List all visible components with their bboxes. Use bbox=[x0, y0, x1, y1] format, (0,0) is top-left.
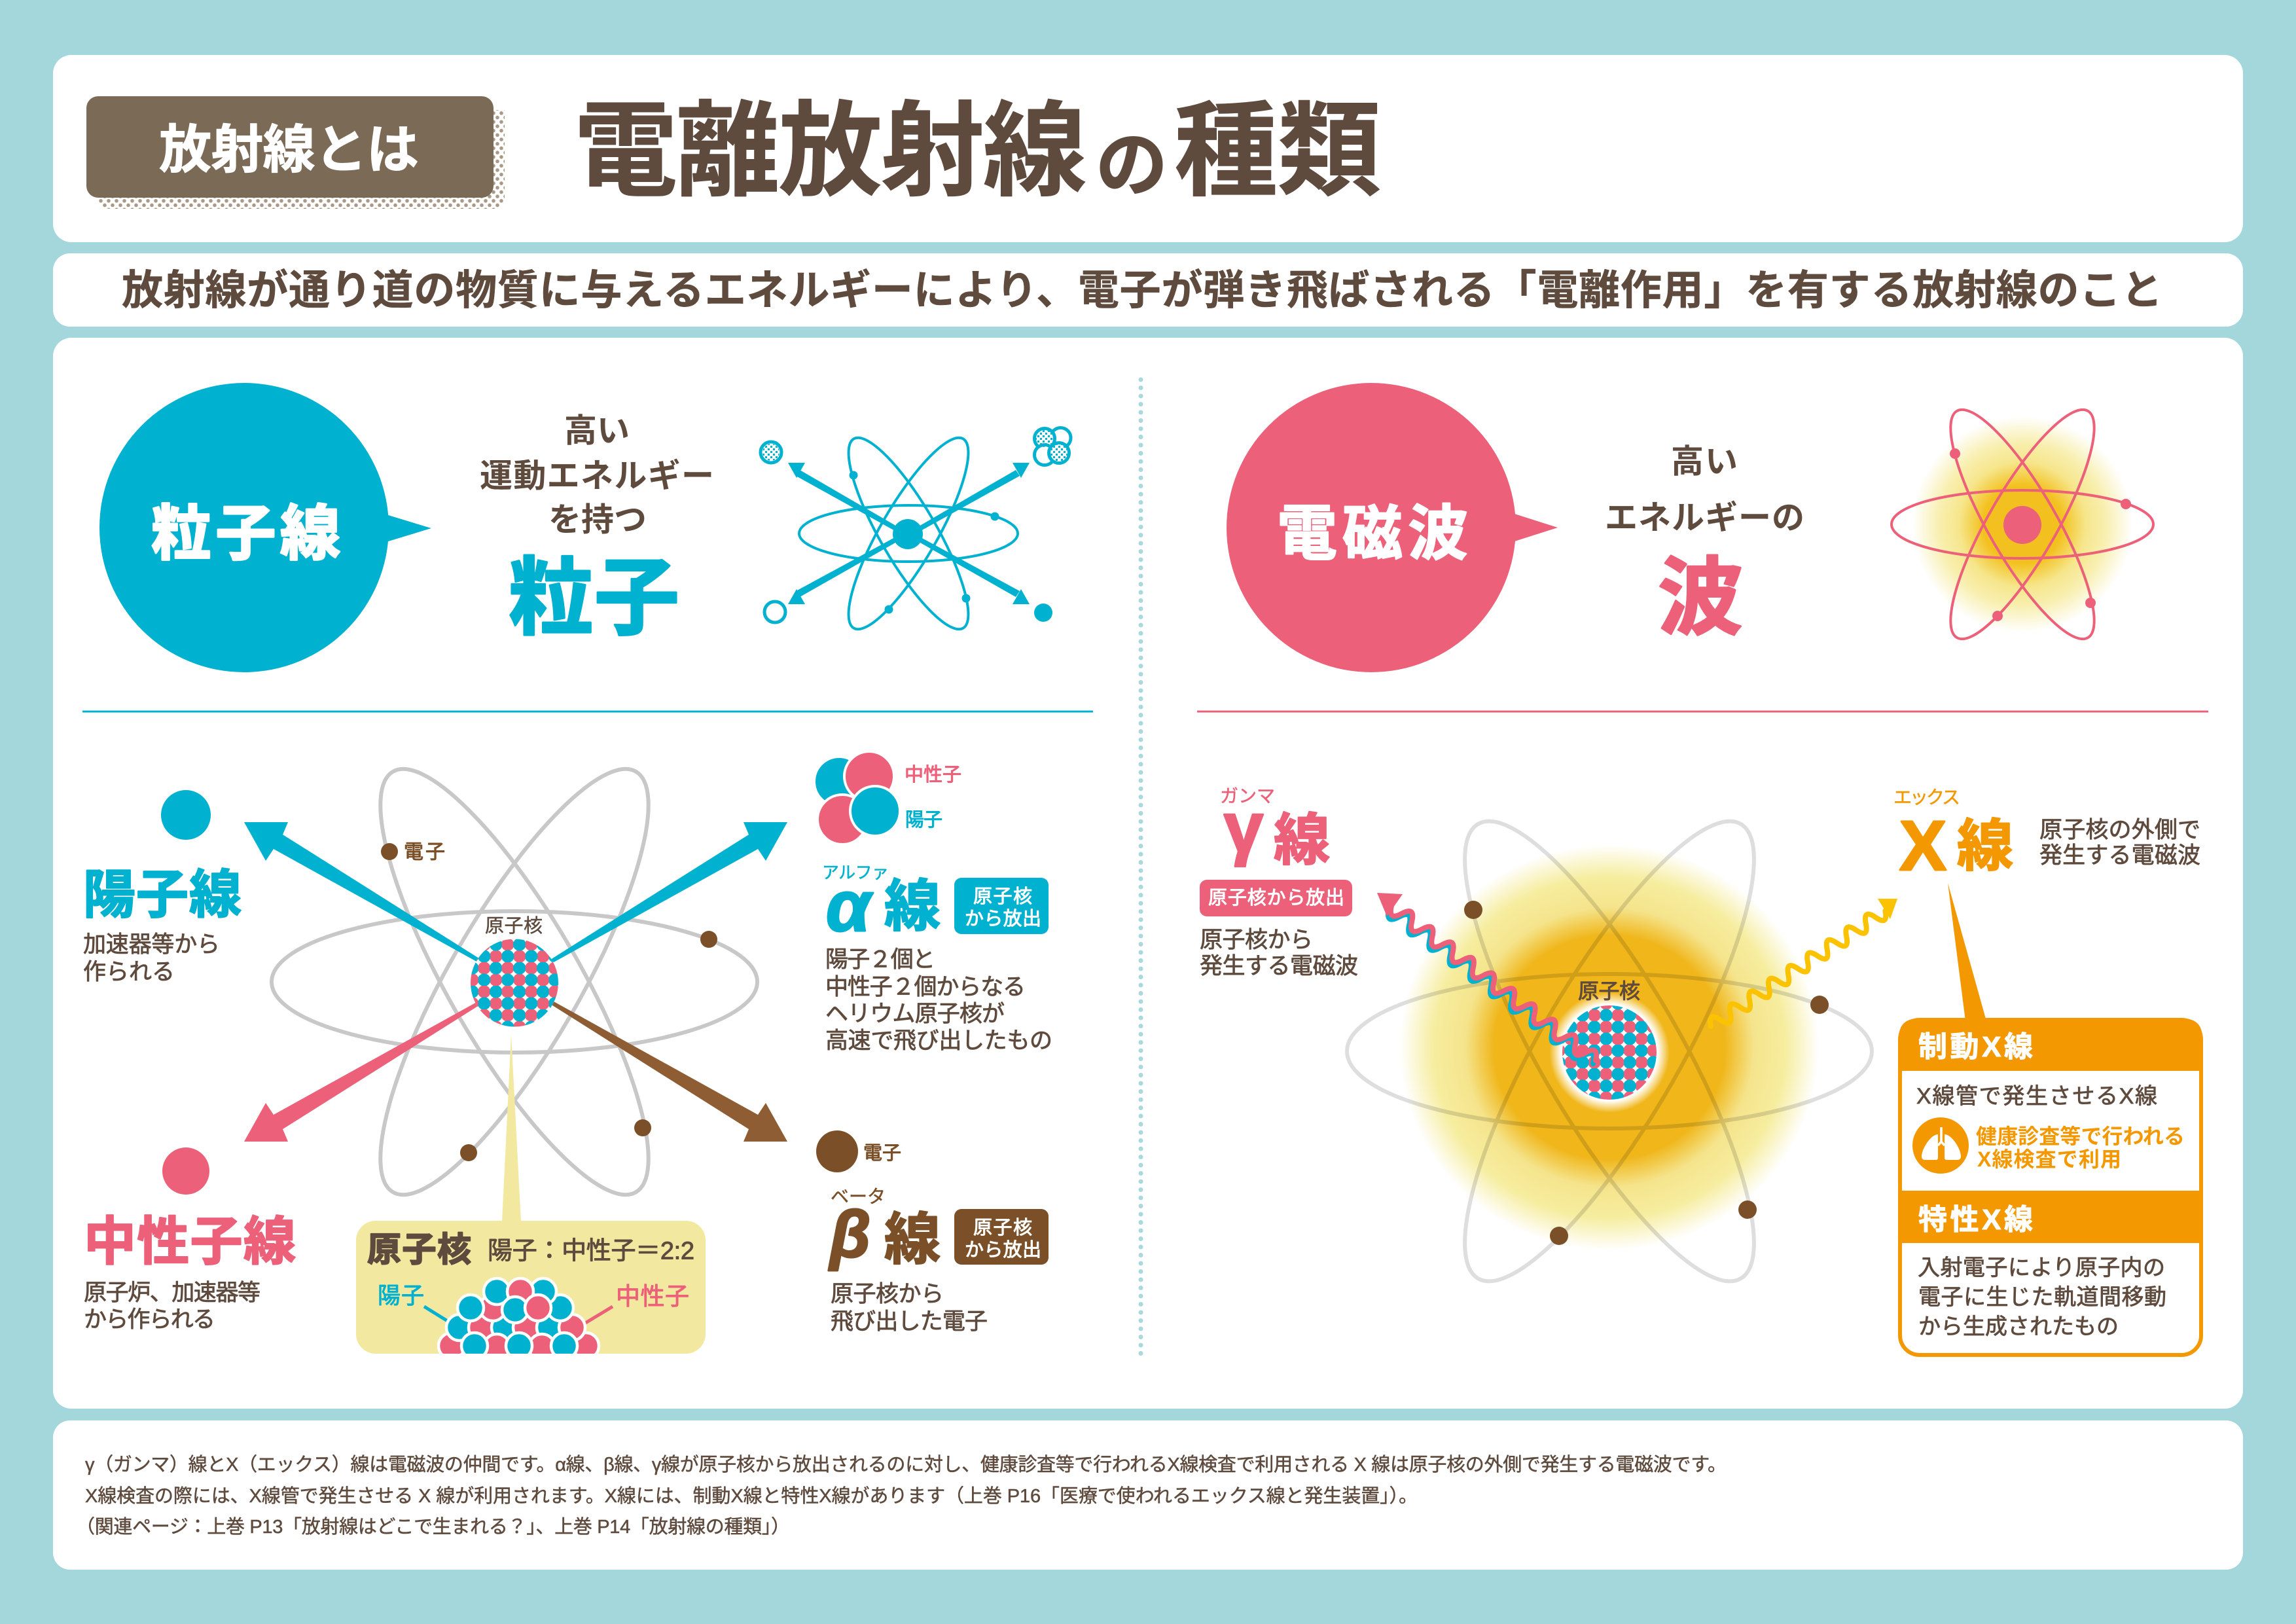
arrow: gamma wave bbox=[1377, 893, 1596, 1064]
block: gamma radiation: 線 bbox=[1274, 809, 1330, 872]
block: beta radiation bbox=[816, 1130, 1049, 1335]
bubble: 粒子線: 粒子線 bbox=[151, 501, 340, 568]
title: 種類 bbox=[1174, 94, 1381, 209]
icon: particle atom bbox=[761, 425, 1071, 642]
arrow: alpha bbox=[550, 822, 787, 962]
block: neutron radiation bbox=[84, 1147, 296, 1333]
callout: nucleus: 中性子 bbox=[616, 1283, 689, 1310]
diagram: particle radiation atom bbox=[244, 739, 787, 1225]
block: X-ray radiation: 原子核の外側で bbox=[2039, 818, 2200, 843]
icon: lungs bbox=[1912, 1117, 1969, 1174]
text: 高いエネルギーの波: 高い bbox=[1671, 443, 1738, 480]
block: beta radiation: β bbox=[828, 1198, 870, 1271]
block: alpha radiation: 中性子２個からなる bbox=[825, 975, 1026, 1000]
block: proton radiation: 作られる bbox=[83, 960, 175, 985]
arrow: beta bbox=[550, 1001, 787, 1142]
block: alpha radiation: α bbox=[826, 866, 874, 947]
text: 高いエネルギーの波: 波 bbox=[1658, 550, 1743, 646]
badge: 原子核から放出: 原子核 bbox=[973, 886, 1032, 907]
callout: nucleus: 陽子 bbox=[378, 1284, 424, 1309]
block: beta radiation: 飛び出した電子 bbox=[831, 1309, 988, 1335]
block: alpha radiation: 中性子 bbox=[905, 764, 961, 785]
text: 高い運動エネルギーを持つ粒子 bbox=[480, 412, 714, 646]
label: 電子: 電子 bbox=[404, 842, 445, 863]
badge: 原子核から放出: 原子核から放出 bbox=[1208, 887, 1344, 909]
bubble: 電磁波 bbox=[1227, 383, 1558, 672]
panel: footer note bbox=[53, 1420, 2243, 1570]
arrow: X-ray wave bbox=[1710, 899, 1897, 1026]
header: 制動X線: 制動X線 bbox=[1918, 1031, 2033, 1063]
callout: X-ray types: X線検査で利用 bbox=[1977, 1147, 2121, 1171]
callout: X-ray types: 電子に生じた軌道間移動 bbox=[1918, 1285, 2166, 1310]
panel: footer note: （関連ページ：上巻 P13「放射線はどこで生まれる？」、上巻 P14「放射線の種類」） bbox=[76, 1516, 790, 1538]
callout pointer bbox=[502, 1034, 521, 1221]
block: X-ray radiation bbox=[1893, 787, 2200, 885]
block: proton radiation: 陽子線 bbox=[83, 865, 242, 924]
arrow: proton bbox=[244, 822, 481, 962]
icon: helium nucleus bbox=[814, 751, 900, 844]
panel: definition band bbox=[53, 253, 2243, 327]
nucleus bbox=[471, 939, 558, 1026]
nucleon pile bbox=[424, 1278, 613, 1360]
bubble: 粒子線 bbox=[99, 383, 431, 672]
badge: 原子核から放出 bbox=[1200, 880, 1352, 916]
block: alpha radiation: 陽子２個と bbox=[825, 947, 935, 973]
block: proton radiation: 加速器等から bbox=[83, 932, 220, 958]
text: 高い運動エネルギーを持つ粒子: 粒子 bbox=[509, 550, 679, 646]
block: alpha radiation: 線 bbox=[884, 875, 941, 938]
label: 原子核: 原子核 bbox=[1578, 979, 1640, 1003]
callout: nucleus: 原子核 bbox=[367, 1231, 471, 1269]
block: gamma radiation: γ bbox=[1224, 787, 1263, 867]
header: 制動X線 bbox=[1899, 1019, 2202, 1071]
block: alpha radiation: ヘリウム原子核が bbox=[825, 1001, 1005, 1027]
panel: header bbox=[53, 55, 2243, 242]
block: beta radiation: 原子核から bbox=[831, 1282, 944, 1307]
block: X-ray radiation: 線 bbox=[1957, 815, 2013, 878]
diagram: electromagnetic atom bbox=[1345, 820, 1897, 1283]
callout: X-ray types: 健康診査等で行われる bbox=[1976, 1125, 2185, 1148]
callout: X-ray types bbox=[1899, 883, 2202, 1355]
block: neutron radiation: 原子炉、加速器等 bbox=[84, 1280, 260, 1306]
block: gamma radiation bbox=[1200, 785, 1358, 979]
panel: main bbox=[53, 338, 2243, 1409]
badge: 放射線とは: 放射線とは bbox=[159, 120, 419, 179]
title bbox=[574, 94, 1381, 209]
title: 電離放射線 bbox=[574, 94, 1086, 209]
block: neutron radiation: 中性子線 bbox=[84, 1212, 296, 1271]
nucleus bbox=[1562, 1005, 1657, 1100]
block: X-ray radiation: X bbox=[1899, 806, 1946, 885]
badge: 原子核から放出: から放出 bbox=[965, 1239, 1041, 1261]
panel: footer note: γ（ガンマ）線とX（エックス）線は電磁波の仲間です。α線、β線、γ線が原子核から放出されるのに対し、健康診査等で行われるX線検査で利用される X 線は原子核の外側で発生する電磁波です。 bbox=[85, 1454, 1727, 1475]
callout: nucleus: 陽子：中性子＝2:2 bbox=[488, 1237, 694, 1265]
block: gamma radiation: ガンマ bbox=[1220, 785, 1275, 806]
header: 特性X線: 特性X線 bbox=[1918, 1204, 2033, 1236]
bubble: 電磁波: 電磁波 bbox=[1277, 501, 1468, 568]
text: 高いエネルギーの波: エネルギーの bbox=[1605, 499, 1804, 536]
callout: X-ray types: X線管で発生させるX線 bbox=[1916, 1084, 2157, 1109]
block: proton radiation bbox=[83, 790, 242, 985]
block: neutron radiation: から作られる bbox=[84, 1307, 215, 1333]
electrons bbox=[381, 843, 717, 1161]
arrow: neutron bbox=[244, 1001, 481, 1142]
block: beta radiation: ベータ bbox=[831, 1186, 886, 1206]
badge: 放射線とは bbox=[86, 96, 505, 209]
text: 高いエネルギーの波 bbox=[1605, 443, 1804, 646]
icon: wave atom bbox=[1892, 394, 2153, 655]
header: 特性X線 bbox=[1899, 1191, 2202, 1243]
callout: X-ray types: 入射電子により原子内の bbox=[1918, 1255, 2165, 1280]
block: X-ray radiation: エックス bbox=[1893, 787, 1960, 807]
panel: footer note: X線検査の際には、X線管で発生させる X 線が利用されます。X線には、制動X線と特性X線があります（上巻 P16「医療で使われるエックス線と発生装置」）。 bbox=[85, 1485, 1418, 1507]
block: alpha radiation: アルファ bbox=[822, 863, 889, 882]
block: alpha radiation bbox=[814, 751, 1052, 1054]
callout: nucleus bbox=[356, 1221, 706, 1360]
title: の bbox=[1096, 125, 1168, 206]
definition text: 放射線が通り道の物質に与えるエネルギーにより、電子が弾き飛ばされる「電離作用」を有する放射線のこと bbox=[122, 268, 2162, 314]
block: X-ray radiation: 発生する電磁波 bbox=[2039, 843, 2200, 869]
block: beta radiation: 電子 bbox=[863, 1143, 901, 1164]
block: gamma radiation: 原子核から bbox=[1200, 928, 1313, 953]
text: 高い運動エネルギーを持つ粒子: 運動エネルギー bbox=[480, 458, 714, 494]
block: gamma radiation: 発生する電磁波 bbox=[1200, 954, 1358, 979]
block: beta radiation: 線 bbox=[884, 1208, 941, 1271]
label: 原子核: 原子核 bbox=[485, 915, 543, 937]
badge: 原子核から放出: から放出 bbox=[965, 908, 1041, 929]
badge: 原子核から放出: 原子核 bbox=[973, 1217, 1032, 1238]
callout: X-ray types: から生成されたもの bbox=[1918, 1314, 2119, 1339]
badge: 原子核から放出 bbox=[954, 1209, 1049, 1265]
text: 高い運動エネルギーを持つ粒子: を持つ bbox=[548, 501, 647, 538]
electrons bbox=[1464, 901, 1829, 1245]
badge: 原子核から放出 bbox=[954, 878, 1049, 934]
block: alpha radiation: 高速で飛び出したもの bbox=[825, 1028, 1052, 1054]
block: alpha radiation: 陽子 bbox=[905, 810, 942, 831]
text: 高い運動エネルギーを持つ粒子: 高い bbox=[564, 412, 630, 449]
